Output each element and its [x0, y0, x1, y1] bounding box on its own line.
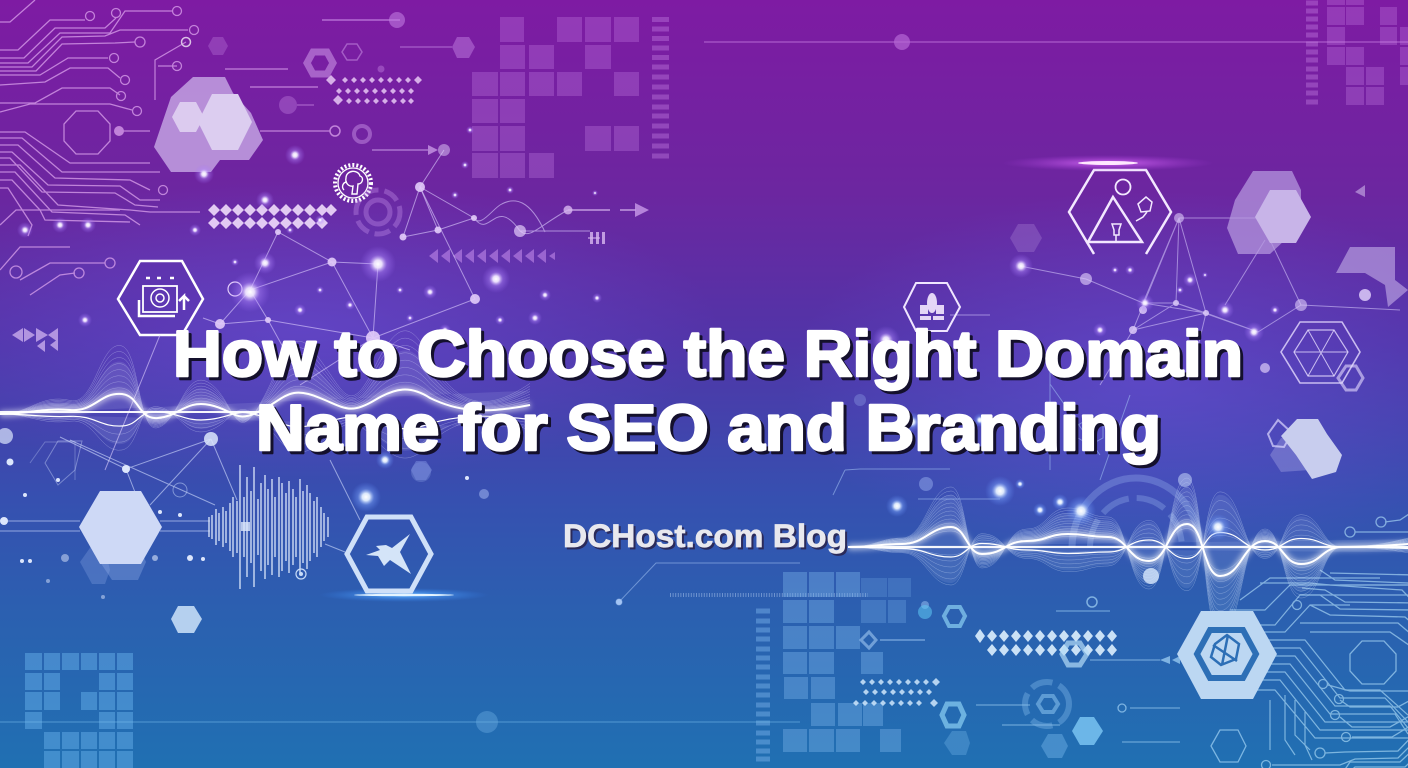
network upper left — [105, 150, 590, 470]
bottom rule with node — [0, 711, 800, 733]
dotted row lower middle — [670, 593, 868, 597]
blue network lower left — [0, 437, 360, 552]
title: How to Choose the Right Domain — [173, 317, 1243, 390]
diamond rows mid left — [208, 204, 337, 229]
square grid bottom left — [25, 653, 133, 768]
flare blue — [319, 588, 489, 602]
glowing dots field — [17, 126, 1280, 354]
flare purple — [1003, 155, 1213, 171]
hexagon icon left — [118, 261, 203, 335]
gear icon — [335, 165, 371, 201]
top rule with node — [704, 34, 1408, 50]
right wave glowing line — [848, 524, 1408, 576]
arc rings lower right — [1072, 478, 1200, 548]
hexagon cluster right — [1010, 171, 1408, 307]
network lines lower middle — [616, 370, 1130, 605]
square grid bottom middle — [783, 572, 911, 752]
left wave mesh — [0, 331, 530, 458]
hexagon outlines right — [1281, 322, 1363, 390]
bar strip top right — [1306, 3, 1318, 102]
triangle pattern left — [12, 328, 58, 352]
hexagon cluster top left — [154, 77, 263, 172]
arrow right of network — [564, 203, 649, 244]
right wave fill — [848, 487, 1408, 622]
blue dots lower left — [0, 428, 489, 599]
hexagon icon bottom right — [1177, 611, 1277, 699]
soundwave node — [241, 522, 306, 579]
background haze — [0, 180, 1408, 570]
square grid top right — [1327, 0, 1408, 105]
triangle row — [429, 249, 555, 263]
network right — [950, 218, 1400, 385]
bar strip top centre — [652, 20, 669, 156]
small connector nodes top centre — [208, 12, 475, 155]
pale hexagons lower left — [79, 461, 432, 633]
bolts and connectors lower right — [861, 597, 1246, 762]
hexagon cluster lower right — [1268, 419, 1342, 479]
diamond rows lower right — [975, 629, 1117, 656]
soundwave — [209, 465, 328, 589]
title — [173, 317, 1243, 464]
hexagon bird icon — [347, 517, 431, 591]
right wave mesh — [848, 478, 1408, 634]
subtitle: DCHost.com Blog — [563, 518, 847, 554]
left wave fill — [0, 350, 530, 451]
bar strip bottom middle — [756, 611, 770, 759]
hexagon people icon — [904, 283, 960, 331]
network nodes upper left — [215, 144, 526, 345]
diamond rows top — [326, 75, 422, 105]
square grid top centre — [472, 17, 639, 178]
hexagon triangle icon — [1069, 170, 1171, 254]
glowing dots lower right — [854, 394, 1231, 619]
left wave glowing line — [0, 390, 530, 429]
target rings — [356, 190, 400, 234]
small diamond rows bottom centre — [853, 678, 940, 707]
circuit traces top left — [0, 0, 340, 295]
network nodes right — [1080, 213, 1371, 373]
title: Name for SEO and Branding — [256, 391, 1161, 464]
circuit traces bottom right — [1230, 500, 1408, 768]
